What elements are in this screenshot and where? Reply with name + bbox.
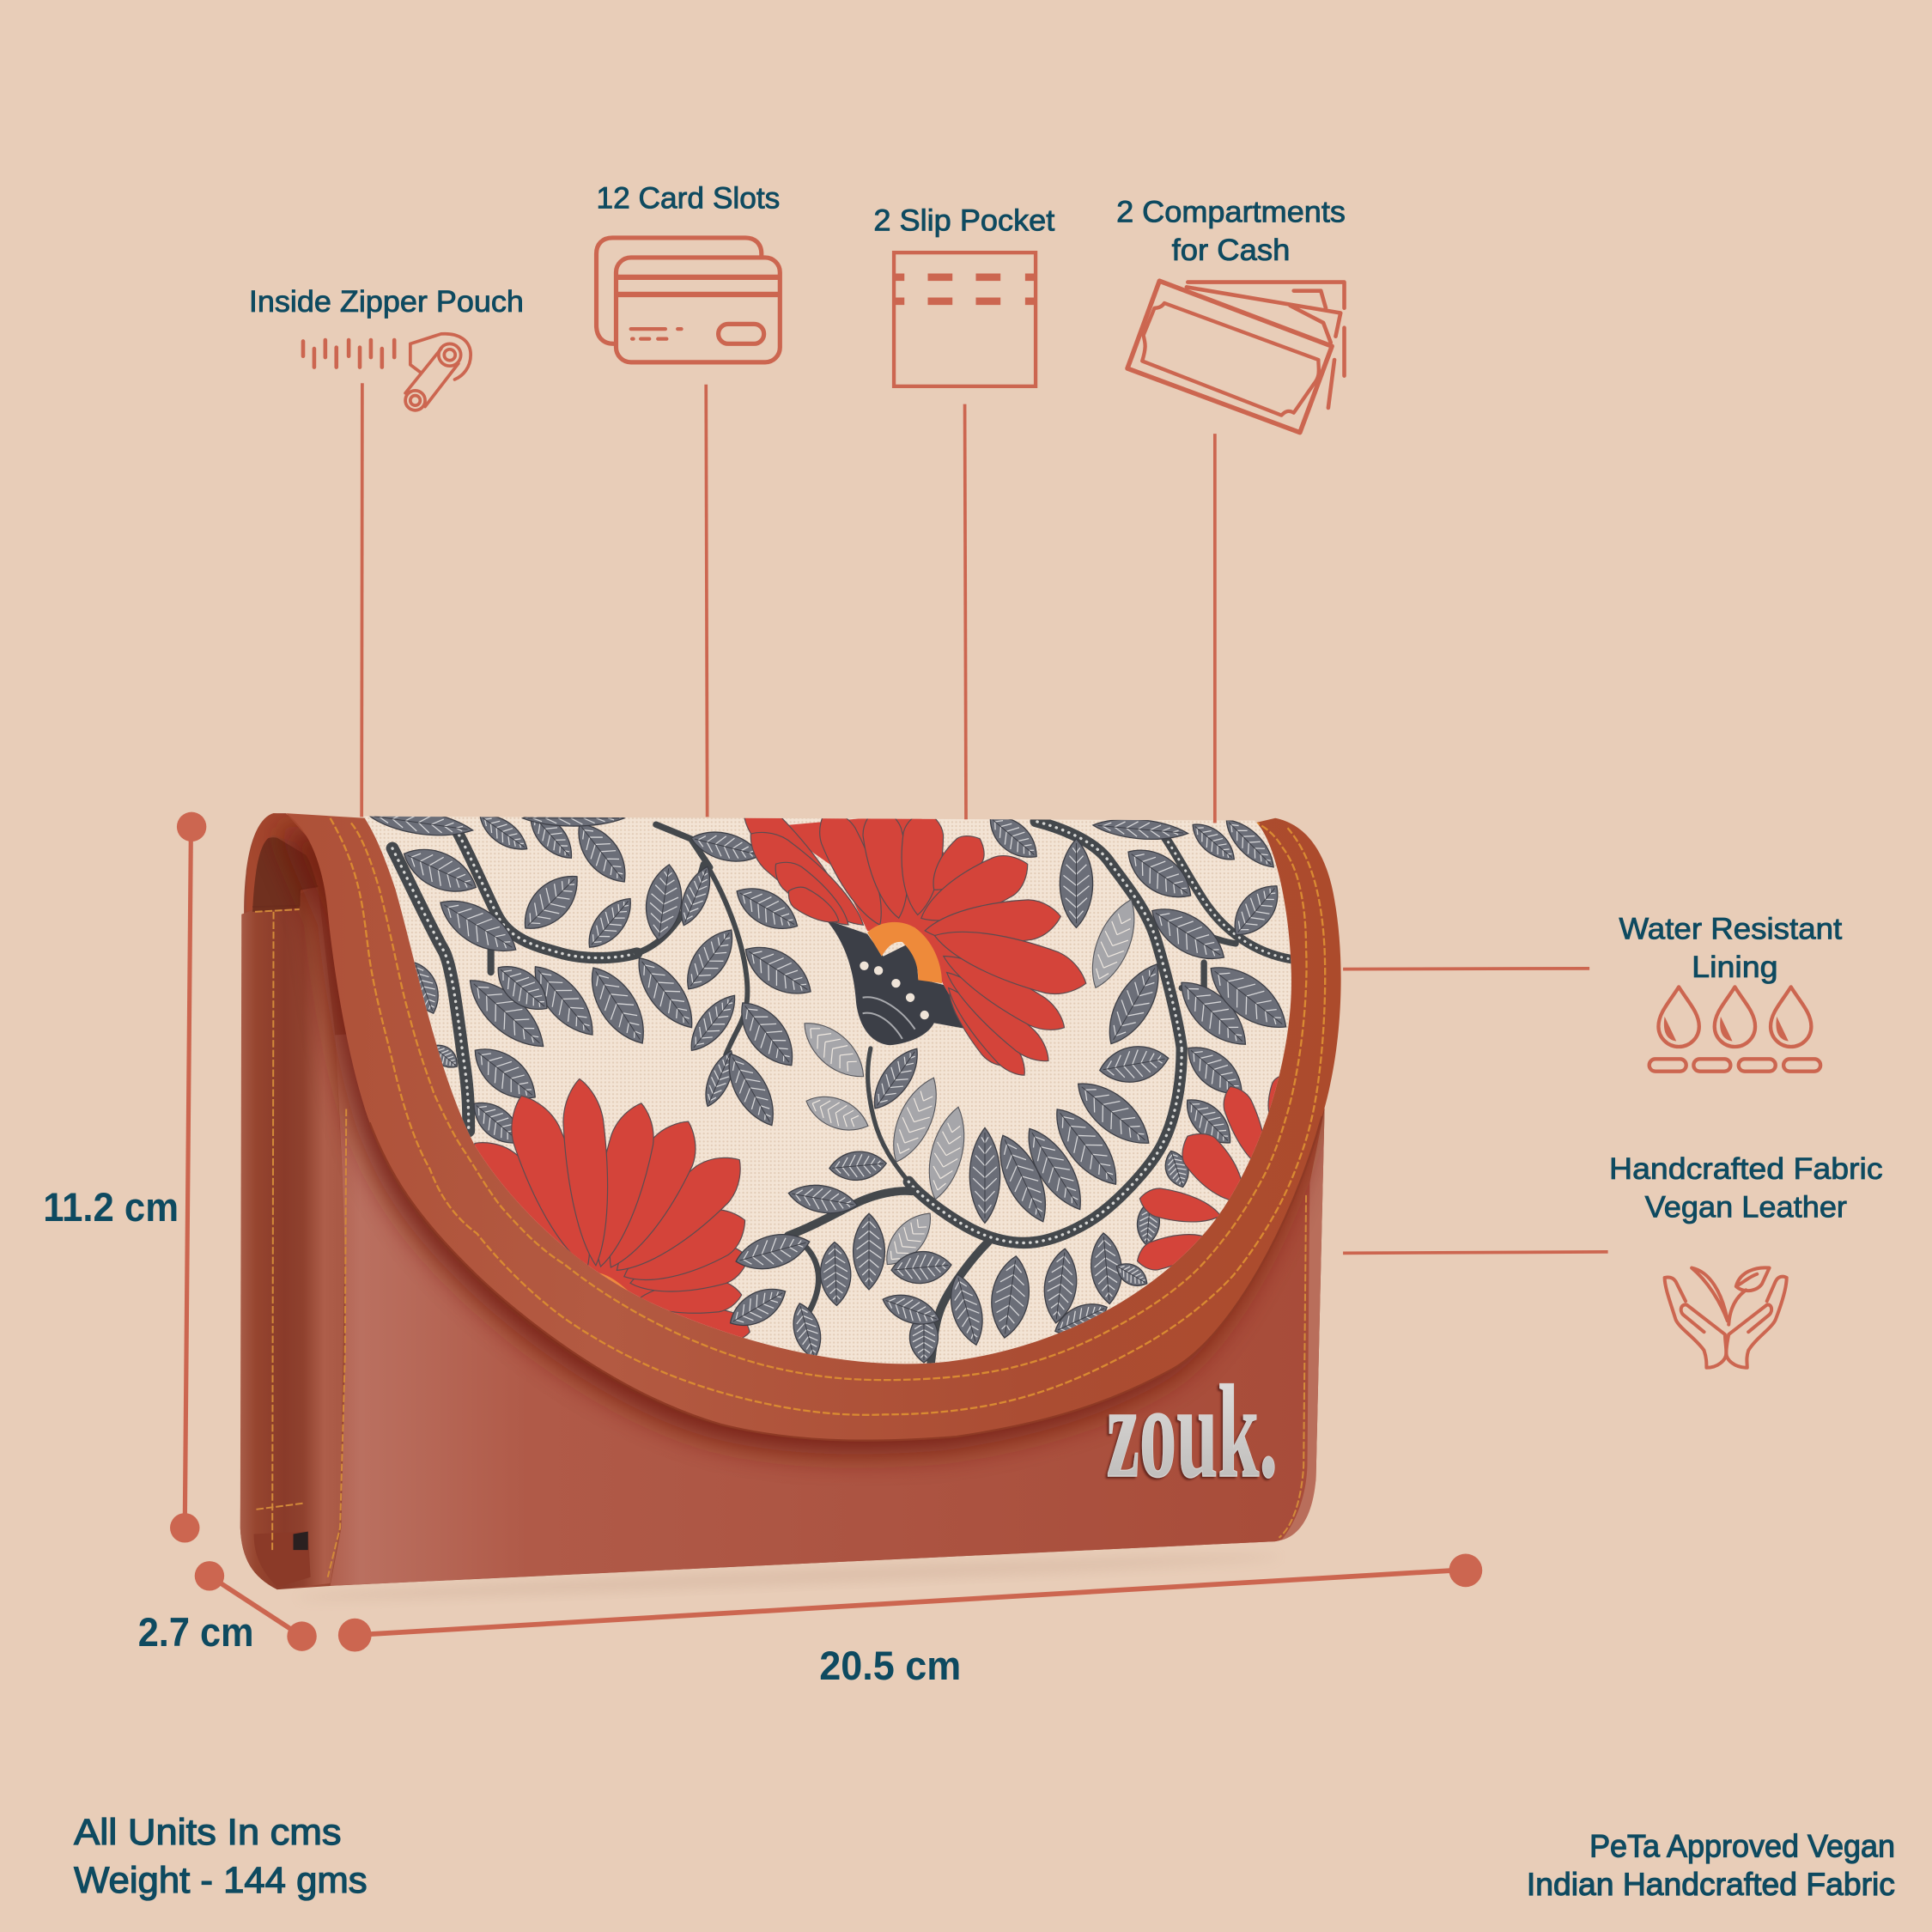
- note: peta approved: [1527, 1828, 1895, 1902]
- fabric floral panel: [364, 816, 1291, 1364]
- note: peta approved: Indian Handcrafted Fabric: [1527, 1867, 1895, 1902]
- wallet body: [240, 813, 1331, 1589]
- icon: slip pocket: [893, 252, 1036, 386]
- icon: zipper: [303, 334, 471, 410]
- flap leather band: [286, 813, 1341, 1441]
- icon: cards: [597, 238, 780, 362]
- leader line: vegan leather: [1343, 1252, 1608, 1253]
- flower calyx: [826, 920, 969, 1045]
- leader line: compartments: [1214, 434, 1216, 823]
- leader line: slip pocket: [965, 404, 966, 819]
- zouk logo: zouk.: [1107, 1358, 1278, 1505]
- label: inside zipper pouch: Inside Zipper Pouch: [249, 285, 524, 319]
- note: peta approved: PeTa Approved Vegan: [1589, 1828, 1895, 1863]
- left gusset fold: [240, 887, 345, 1589]
- dimension: height: [43, 812, 206, 1543]
- label: handcrafted fabric vegan leather: [1609, 1152, 1883, 1224]
- front panel: [331, 986, 1321, 1586]
- body stitching: [255, 909, 1306, 1577]
- label: 2 slip pocket: 2 Slip Pocket: [873, 204, 1055, 237]
- label: 12 card slots: 12 Card Slots: [597, 182, 780, 216]
- label: 2 compartments for cash: 2 Compartments: [1116, 195, 1346, 228]
- left pattern: vines and leaves: [368, 805, 820, 1359]
- red flower top: [730, 789, 1092, 1083]
- red flower lower left: [456, 1077, 756, 1359]
- stitching: [331, 818, 1325, 1415]
- height value: 11.2 cm: [43, 1185, 179, 1230]
- note: units and weight: Weight - 144 gms: [74, 1860, 368, 1901]
- note: units and weight: [74, 1812, 368, 1901]
- label: 2 compartments for cash: for Cash: [1172, 234, 1290, 267]
- label: 2 compartments for cash: [1116, 195, 1346, 267]
- leader line: water resistant: [1343, 968, 1589, 970]
- icon: cash notes: [1127, 281, 1345, 433]
- leader line: card slots: [706, 385, 708, 817]
- width value: 20.5 cm: [819, 1643, 961, 1689]
- red flower right: [1137, 1076, 1279, 1271]
- dimension: width: [338, 1553, 1482, 1689]
- label: water resistant lining: [1619, 912, 1842, 984]
- depth value: 2.7 cm: [138, 1610, 254, 1656]
- icon: water drops: [1649, 987, 1820, 1072]
- right pattern: vines, leaves and flowers: [723, 789, 1297, 1363]
- label: water resistant lining: Lining: [1692, 951, 1778, 984]
- note: units and weight: All Units In cms: [74, 1812, 341, 1853]
- label: handcrafted fabric vegan leather: Handcrafted Fabric: [1609, 1152, 1883, 1186]
- label: water resistant lining: Water Resistant: [1619, 912, 1842, 945]
- leader line: zipper pouch: [361, 383, 363, 817]
- dimension: depth: [138, 1561, 317, 1656]
- wallet photo: [240, 789, 1341, 1605]
- label: handcrafted fabric vegan leather: Vegan Leather: [1645, 1191, 1847, 1224]
- icon: hands and leaf: [1665, 1267, 1787, 1368]
